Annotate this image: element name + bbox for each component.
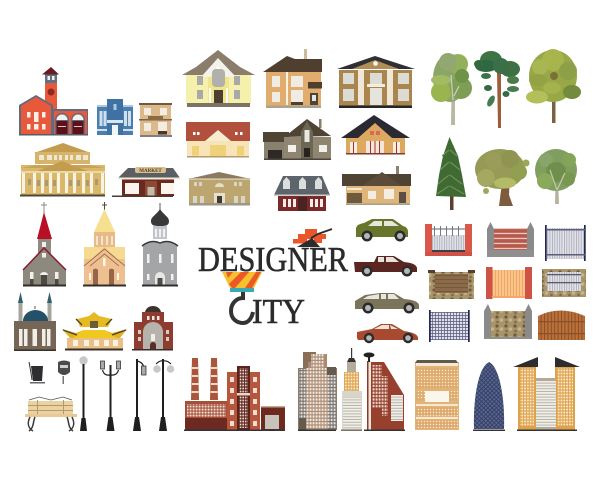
icon: fire station bbox=[19, 67, 88, 136]
icon: gothic church bbox=[23, 202, 66, 286]
icon: small tan building bbox=[139, 103, 172, 137]
icon: gherkin tower bbox=[473, 362, 505, 431]
icon: crane hook bbox=[222, 272, 262, 323]
icon: spire skyscraper bbox=[341, 348, 362, 431]
title: ITY: ITY bbox=[252, 292, 305, 331]
icon: blue building bbox=[97, 99, 133, 135]
icon: broad green tree bbox=[526, 49, 581, 123]
icon: brown skyscraper bbox=[298, 352, 337, 431]
icon: factory bbox=[184, 358, 285, 431]
icon: oak tree bbox=[475, 149, 530, 206]
icon: classical house bbox=[337, 56, 415, 108]
icon: market building bbox=[112, 167, 180, 197]
icon: grey pillar fence with red planks bbox=[487, 222, 534, 257]
icon: dark roof brick house bbox=[341, 115, 410, 154]
icon: brick cathedral bbox=[132, 306, 173, 350]
icon: wide tan house bbox=[342, 166, 411, 205]
text: market sign: MARKET bbox=[139, 169, 162, 174]
icon: twin globe lamp bbox=[153, 359, 174, 431]
icon: street bin with bag bbox=[29, 362, 45, 384]
icon: yellow villa bbox=[182, 50, 255, 107]
icon: maroon pickup bbox=[354, 256, 417, 276]
icon: twin-roof tower bbox=[513, 357, 580, 431]
icon: beige manor bbox=[188, 172, 251, 206]
icon: grey wagon bbox=[355, 293, 419, 314]
icon: double lantern lamp bbox=[100, 361, 120, 431]
icon: orange plank fence bbox=[486, 267, 532, 299]
icon: iron fence bbox=[545, 225, 586, 261]
icon: litter bin bbox=[58, 360, 70, 384]
icon: grey garage house bbox=[263, 119, 331, 160]
icon: fir tree bbox=[436, 137, 466, 210]
icon: buddhist temple bbox=[62, 312, 127, 350]
icon: stone fence with railing bbox=[542, 269, 586, 297]
icon: brick pillar fence with railing bbox=[425, 224, 472, 256]
icon: green suv bbox=[356, 219, 408, 242]
icon: pine tree bbox=[474, 51, 520, 128]
icon: stone fence with brown planks bbox=[428, 270, 475, 299]
icon: birch tree bbox=[431, 53, 472, 125]
icon: tan office tower bbox=[415, 360, 459, 430]
title: trowel and bricks bbox=[293, 229, 332, 247]
icon: mosque bbox=[14, 292, 56, 351]
icon: red sports car bbox=[357, 324, 418, 343]
title: DESIGNER: DESIGNER bbox=[198, 240, 349, 279]
icon: stone wall with grey pillars bbox=[484, 304, 532, 339]
icon: red roof house bbox=[186, 122, 250, 158]
icon: mansard house bbox=[274, 176, 330, 211]
icon: orthodox church bbox=[142, 203, 178, 286]
icon: park bench bbox=[25, 397, 77, 431]
icon: theatre bbox=[20, 143, 105, 196]
icon: single lantern lamp bbox=[133, 359, 146, 431]
icon: young tree bbox=[535, 149, 577, 204]
icon: arched wooden fence bbox=[538, 310, 585, 340]
icon: mesh fence bbox=[429, 310, 470, 342]
icon: globe street lamp bbox=[79, 356, 88, 431]
icon: orange church bbox=[83, 202, 126, 286]
icon: tan two-storey house bbox=[263, 49, 322, 108]
icon: slanted rust skyscraper bbox=[364, 352, 405, 431]
